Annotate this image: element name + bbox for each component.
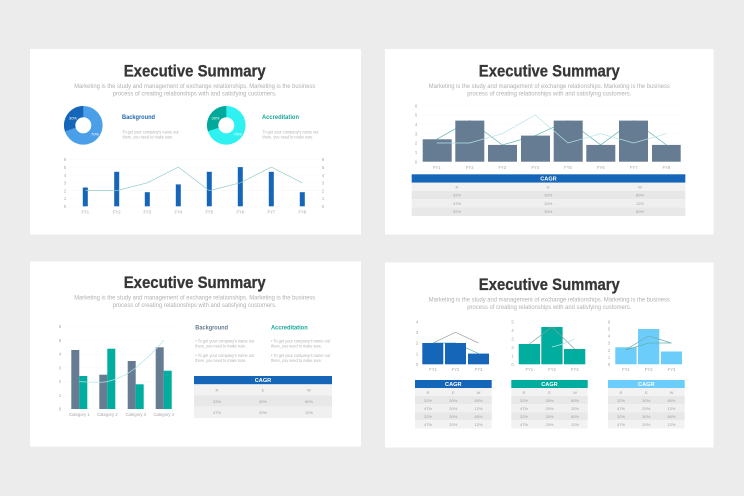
table: light blue CAGR: W	[670, 390, 674, 395]
text: accreditation: • To get your company's name out	[271, 353, 331, 358]
table: light blue CAGR: 20%	[642, 422, 651, 427]
intro text	[429, 296, 670, 311]
combo chart: FY1 to FY8: 0	[415, 159, 418, 164]
table: teal CAGR: 20%	[545, 422, 554, 427]
title: Executive Summary	[479, 62, 621, 80]
heading: accreditation: Accreditation	[262, 115, 299, 121]
combo chart: FY1 to FY8: 0	[322, 204, 325, 209]
table: light blue CAGR: 80%	[667, 414, 676, 419]
title: Executive Summary	[124, 62, 266, 80]
table: blue CAGR: 30%	[449, 398, 458, 403]
table: light blue CAGR: 32%	[617, 414, 625, 419]
clustered column chart: 2	[59, 379, 62, 384]
combo chart: FY1 to FY8	[64, 157, 325, 214]
intro text: process of creating relationships with and satisfying customers.	[467, 90, 631, 97]
clustered column chart: Category 4	[153, 412, 175, 417]
table: CAGR: W	[638, 184, 642, 189]
combo chart: FY1 to FY8: FY5	[564, 165, 573, 170]
clustered column chart: 0	[59, 406, 62, 412]
combo chart: FY1 to FY8: 6	[322, 157, 325, 162]
table: teal CAGR: 30%	[545, 414, 554, 419]
combo chart: FY1 to FY8: FY6	[236, 210, 245, 214]
table: CAGR: 47%	[213, 410, 221, 415]
intro text: process of creating relationships with and satisfying customers.	[467, 304, 631, 311]
table: teal CAGR: R	[523, 390, 526, 395]
table: teal CAGR: CAGR	[541, 382, 558, 388]
combo chart: FY1 to FY8: FY2	[466, 165, 474, 170]
table: blue CAGR: 80%	[474, 398, 483, 403]
combo chart: FY1 to FY8: 3	[415, 131, 418, 136]
table: CAGR: 20%	[259, 410, 267, 415]
combo chart: FY1 to FY8: 3	[64, 181, 67, 186]
doughnut: accreditation: 30%	[211, 116, 220, 120]
chart: light blue columns: 2	[608, 348, 611, 353]
table: CAGR	[412, 174, 685, 216]
table: CAGR: 20%	[544, 201, 553, 206]
chart: teal columns: FY2	[548, 367, 557, 372]
combo chart: FY1 to FY8: FY6	[597, 165, 605, 170]
chart: teal columns: FY3	[571, 367, 579, 372]
chart: blue columns: 3	[416, 330, 419, 335]
clustered column chart: 4	[59, 352, 62, 357]
chart: blue columns: 1	[416, 351, 419, 356]
table: blue CAGR: W	[477, 390, 481, 395]
text: background	[195, 338, 255, 363]
chart: teal columns: 1	[511, 354, 514, 358]
table: CAGR: W	[307, 388, 311, 392]
table: light blue CAGR: E	[645, 390, 648, 395]
table: light blue CAGR: 30%	[642, 398, 651, 403]
table: teal CAGR: 12%	[571, 406, 579, 411]
table: CAGR: 32%	[213, 399, 221, 404]
text: accreditation: To get your company's name out	[262, 130, 319, 134]
combo chart: FY1 to FY8: FY2	[113, 210, 121, 214]
intro text	[74, 83, 316, 97]
table: CAGR: 47%	[453, 201, 461, 206]
text: background	[122, 130, 179, 140]
combo chart: FY1 to FY8: FY3	[143, 210, 152, 214]
table: teal CAGR: 32%	[520, 414, 528, 419]
table: blue CAGR: 12%	[474, 406, 483, 411]
combo chart: FY1 to FY8: FY8	[298, 210, 307, 214]
intro text: process of creating relationships with and satisfying customers.	[113, 90, 277, 97]
text: background: • To get your company's name out	[195, 338, 255, 344]
panel: clustered columns with text and table	[30, 262, 361, 446]
combo chart: FY1 to FY8: 2	[322, 188, 325, 193]
combo chart: FY1 to FY8: FY1	[81, 210, 90, 214]
table: CAGR: 12%	[305, 410, 313, 415]
chart: teal columns: 0	[511, 362, 514, 367]
heading: background: Background	[195, 326, 228, 332]
text: accreditation: there, you need to make sure.	[262, 134, 314, 140]
text: accreditation	[262, 130, 319, 140]
chart: teal columns: 5	[511, 319, 514, 324]
chart: teal columns: 3	[511, 336, 514, 341]
table: blue CAGR: 80%	[474, 414, 483, 419]
title: Executive Summary	[479, 276, 621, 294]
panel: three charts with tables	[385, 262, 714, 448]
table: CAGR: E	[547, 184, 550, 189]
table: CAGR: 80%	[636, 209, 644, 214]
chart: blue columns: 0	[416, 362, 419, 367]
table: CAGR: CAGR	[255, 378, 271, 384]
combo chart: FY1 to FY8: 1	[322, 196, 325, 201]
combo chart: FY1 to FY8: FY4	[531, 165, 540, 170]
table: blue CAGR: E	[452, 390, 455, 395]
combo chart: FY1 to FY8: FY8	[662, 165, 671, 170]
chart: teal columns	[511, 319, 585, 372]
combo chart: FY1 to FY8: 4	[322, 173, 325, 178]
table: light blue CAGR: CAGR	[638, 382, 655, 388]
combo chart: FY1 to FY8: FY1	[433, 165, 441, 170]
chart: teal columns: FY1	[525, 367, 534, 372]
chart: light blue columns: FY3	[668, 367, 676, 372]
combo chart: FY1 to FY8: 6	[64, 157, 67, 162]
chart: blue columns: FY2	[452, 367, 460, 372]
combo chart: FY1 to FY8: FY7	[630, 165, 638, 170]
table: CAGR: R	[216, 388, 219, 392]
chart: teal columns: 2	[511, 345, 514, 350]
combo chart: FY1 to FY8: FY5	[205, 210, 214, 214]
heading: accreditation: Accreditation	[271, 326, 308, 332]
doughnut: background: 70%	[91, 132, 99, 136]
intro text: Marketing is the study and management of exchange relationships. Marketing is the business	[429, 83, 670, 90]
table: blue CAGR: 32%	[424, 398, 432, 403]
combo chart: FY1 to FY8: 5	[64, 165, 67, 170]
title: Executive Summary	[124, 274, 266, 292]
intro text	[74, 295, 316, 309]
table: CAGR: E	[262, 388, 265, 392]
table: light blue CAGR	[608, 380, 685, 428]
table: CAGR: 80%	[305, 399, 313, 404]
combo chart: FY1 to FY8: FY7	[267, 210, 276, 214]
text: background: • To get your company's name out	[195, 353, 255, 358]
chart: light blue columns: 5	[608, 326, 611, 331]
table: teal CAGR: 12%	[571, 422, 579, 427]
table: CAGR: CAGR	[540, 176, 557, 182]
chart: light blue columns	[608, 319, 682, 372]
table: teal CAGR	[511, 380, 588, 428]
text: accreditation	[271, 338, 331, 363]
text: background: there, you need to make sure.	[195, 344, 246, 348]
table: CAGR: 30%	[259, 399, 267, 404]
chart: light blue columns: 4	[608, 334, 611, 338]
doughnut: accreditation: 70%	[233, 132, 242, 136]
combo chart: FY1 to FY8: 2	[415, 141, 418, 146]
table: light blue CAGR: 32%	[617, 398, 625, 403]
combo chart: FY1 to FY8: 5	[322, 165, 325, 170]
intro text	[429, 83, 670, 97]
table: teal CAGR: 47%	[520, 422, 528, 427]
table: CAGR: R	[456, 184, 459, 189]
intro text: Marketing is the study and management of exchange relationships. Marketing is the business	[429, 296, 670, 304]
table: blue CAGR: 32%	[424, 414, 432, 419]
chart: teal columns: 4	[511, 328, 514, 333]
clustered column chart: 3	[59, 365, 62, 370]
combo chart: FY1 to FY8: FY3	[498, 165, 507, 170]
table: teal CAGR: 80%	[571, 414, 579, 419]
table: light blue CAGR: 30%	[642, 414, 651, 419]
combo chart: FY1 to FY8: 4	[415, 122, 418, 127]
chart: blue columns: FY1	[429, 367, 438, 372]
table: light blue CAGR: 47%	[617, 422, 625, 427]
doughnut: background: 30%	[69, 116, 77, 120]
combo chart: FY1 to FY8: 3	[322, 181, 325, 186]
table: blue CAGR: 20%	[449, 406, 458, 411]
chart: blue columns: FY3	[475, 367, 483, 372]
panel: bar chart with table	[385, 49, 714, 234]
table: blue CAGR: 20%	[449, 422, 458, 427]
chart: light blue columns: 0	[608, 362, 611, 367]
table: teal CAGR: 47%	[520, 406, 528, 411]
chart: light blue columns: FY2	[645, 367, 653, 372]
clustered column chart: Category 1	[69, 412, 90, 417]
chart: blue columns: 4	[416, 319, 419, 324]
combo chart: FY1 to FY8: 2	[64, 188, 67, 193]
clustered column chart: 5	[59, 338, 62, 343]
table: light blue CAGR: 12%	[667, 406, 676, 411]
table: blue CAGR	[415, 380, 492, 428]
table: CAGR: 30%	[544, 192, 553, 198]
table: teal CAGR: 80%	[571, 398, 579, 403]
table: teal CAGR: E	[548, 390, 551, 395]
table: light blue CAGR: R	[620, 390, 623, 395]
table: blue CAGR: 12%	[474, 422, 483, 427]
heading: background: Background	[122, 115, 155, 121]
combo chart: FY1 to FY8	[415, 103, 681, 170]
clustered column chart: 1	[59, 393, 62, 398]
combo chart: FY1 to FY8: 1	[415, 150, 418, 155]
panel: doughnuts and bar chart	[30, 49, 361, 234]
chart: light blue columns: 6	[608, 319, 611, 324]
table: CAGR: 32%	[453, 192, 461, 198]
table: light blue CAGR: 80%	[667, 398, 676, 403]
combo chart: FY1 to FY8: 1	[64, 196, 67, 201]
text: accreditation: there, you need to make sure.	[271, 358, 322, 363]
chart: blue columns: 2	[416, 341, 419, 346]
doughnut: background	[69, 112, 99, 139]
combo chart: FY1 to FY8: 5	[415, 113, 418, 118]
combo chart: FY1 to FY8: FY4	[174, 210, 183, 214]
table: teal CAGR: 20%	[545, 406, 554, 411]
clustered column chart: 6	[59, 324, 62, 329]
table: light blue CAGR: 20%	[642, 406, 651, 411]
chart: light blue columns: FY1	[622, 367, 631, 372]
text: background: there, you need to make sure.	[122, 134, 174, 140]
table: blue CAGR: R	[427, 390, 430, 395]
table: teal CAGR: 30%	[545, 398, 554, 403]
table: teal CAGR: 32%	[520, 398, 528, 403]
table: CAGR: 12%	[636, 201, 644, 206]
table: CAGR: 80%	[636, 192, 644, 198]
table: CAGR: 32%	[453, 209, 461, 214]
clustered column chart: Category 2	[97, 412, 118, 417]
intro text: Marketing is the study and management of exchange relationships. Marketing is the business	[74, 295, 316, 302]
combo chart: FY1 to FY8: 4	[64, 173, 67, 178]
table: blue CAGR: 30%	[449, 414, 458, 419]
doughnut: accreditation	[211, 112, 242, 139]
intro text: Marketing is the study and management of exchange relationships. Marketing is the business	[74, 83, 316, 90]
text: accreditation: • To get your company's name out	[271, 338, 331, 344]
text: accreditation: there, you need to make sure.	[271, 344, 322, 348]
chart: light blue columns: 3	[608, 341, 611, 346]
chart: light blue columns: 1	[608, 355, 611, 360]
table: light blue CAGR: 47%	[617, 406, 625, 411]
table: blue CAGR: 47%	[424, 422, 432, 427]
clustered column chart: Category 3	[125, 412, 147, 417]
table: CAGR	[194, 376, 332, 418]
combo chart: FY1 to FY8: 0	[64, 204, 67, 209]
table: light blue CAGR: 12%	[667, 422, 676, 427]
table: blue CAGR: 47%	[424, 406, 432, 411]
clustered column chart	[59, 324, 176, 417]
table: teal CAGR: W	[573, 390, 577, 395]
text: background: there, you need to make sure.	[195, 358, 246, 363]
text: background: To get your company's name out	[122, 130, 179, 134]
chart: blue columns	[416, 319, 489, 372]
table: blue CAGR: CAGR	[445, 382, 462, 388]
combo chart: FY1 to FY8: 6	[415, 103, 418, 108]
table: CAGR: 30%	[544, 209, 553, 214]
intro text: process of creating relationships with and satisfying customers.	[113, 302, 277, 309]
